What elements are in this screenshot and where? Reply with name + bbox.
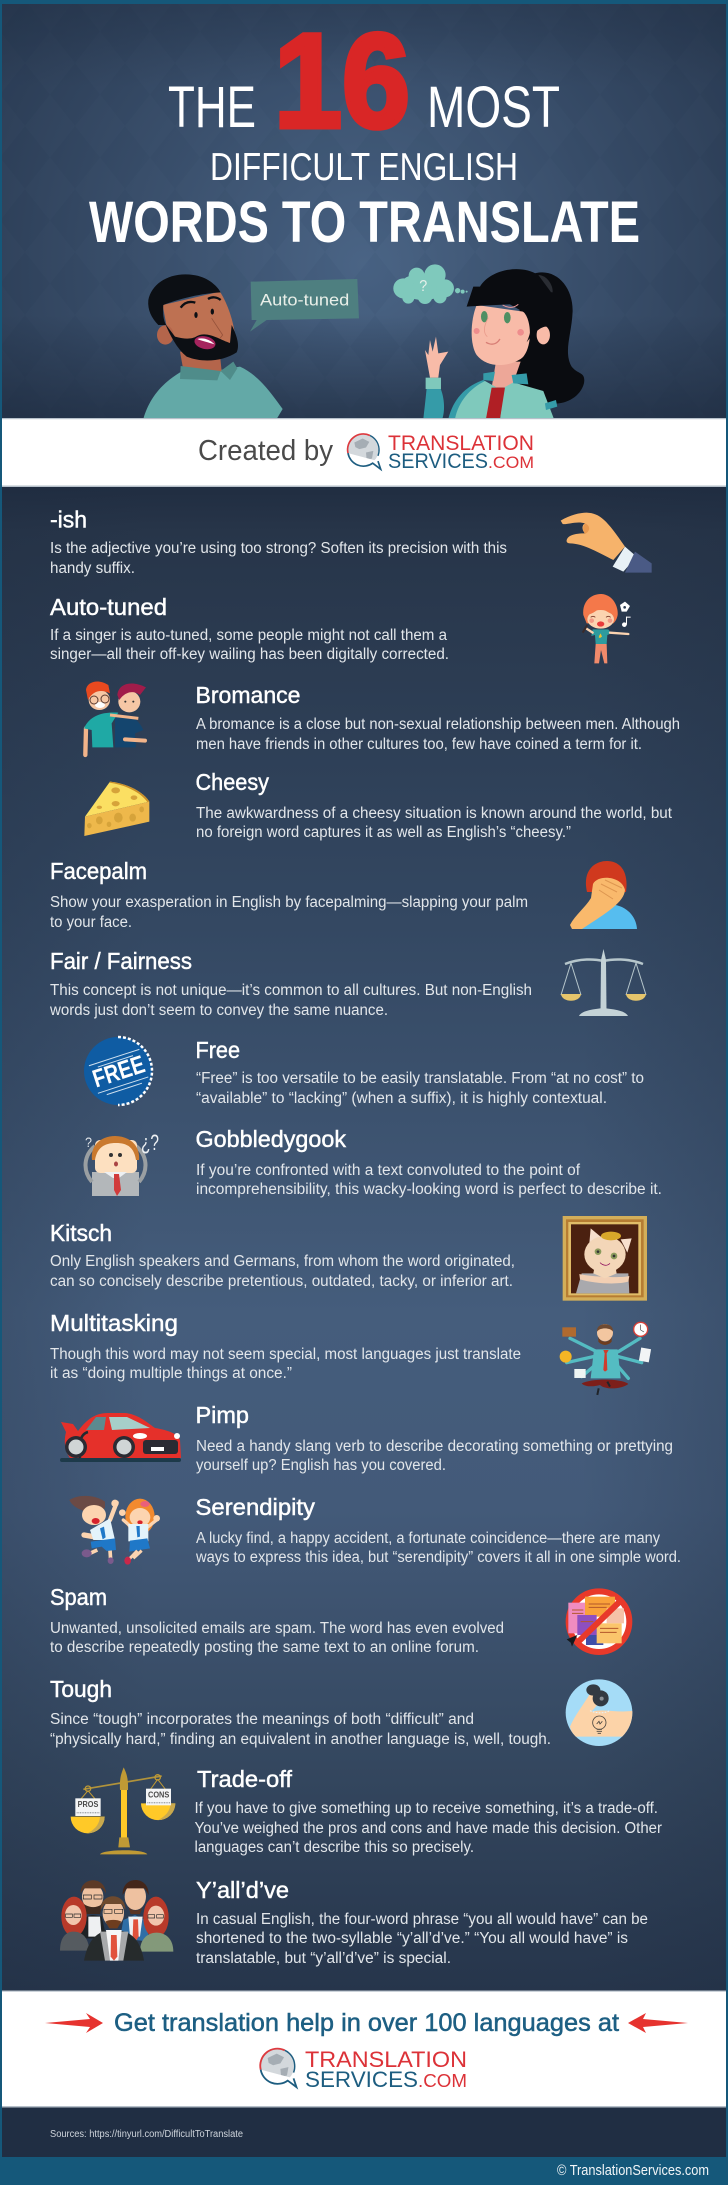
icon: pros and cons scale: PROS <box>78 1800 99 1809</box>
description: Trade-off: If you have to give something up to receive something, it’s a trade-off. <box>194 1800 658 1817</box>
entry: Serendipity <box>195 1494 681 1566</box>
arrow: right <box>628 2013 688 2033</box>
icon: confused man <box>85 1130 159 1196</box>
description: Tough <box>50 1711 551 1748</box>
icon: no spam sign <box>567 1591 629 1652</box>
entry: Y'all'd've: Y’all’d’ve <box>196 1877 289 1903</box>
entry: Cheesy <box>196 769 673 841</box>
description: Serendipity: ways to express this idea, but “serendipity” covers it all in one simple word. <box>195 1549 681 1566</box>
entry: Trade-off <box>194 1766 662 1856</box>
copyright bar <box>0 2157 728 2185</box>
description: Pimp <box>196 1438 673 1474</box>
description: Cheesy: The awkwardness of a cheesy situation is known around the world, but <box>196 805 673 822</box>
entry: Serendipity: Serendipity <box>196 1494 316 1520</box>
icon: confused man: ¿? <box>141 1130 159 1155</box>
description: Trade-off <box>194 1800 662 1856</box>
description: Tough: “physically hard,” finding an equivalent in another language is, well, tough. <box>50 1731 551 1748</box>
thought bubble: ? <box>419 278 427 295</box>
description: Trade-off: languages can’t describe this so precisely. <box>194 1839 474 1856</box>
icon: group of people <box>60 1880 173 1961</box>
description: Kitsch: Only English speakers and Germans, from whom the word originated, <box>50 1253 515 1270</box>
entry: Fair / Fairness: Fair / Fairness <box>50 948 192 974</box>
description: Free: “Free” is too versatile to be easily translatable. From “at no cost” to <box>196 1070 644 1087</box>
icon: jumping children <box>69 1496 160 1565</box>
entry: Pimp <box>196 1402 673 1474</box>
illustration: woman listening <box>423 269 584 419</box>
description: Serendipity: A lucky find, a happy accident, a fortunate coincidence—there are many <box>196 1530 660 1547</box>
icon: free badge <box>84 1037 152 1105</box>
description: -ish: handy suffix. <box>50 560 135 577</box>
description: Pimp: Need a handy slang verb to describe decorating something or prettying <box>196 1438 673 1455</box>
description: Facepalm: to your face. <box>50 914 132 931</box>
entry: Spam <box>50 1584 504 1656</box>
description: Auto-tuned <box>50 627 449 663</box>
description: Fair / Fairness <box>49 982 532 1019</box>
entry: Gobbledygook <box>196 1126 662 1198</box>
icon: framed cat portrait <box>563 1216 647 1301</box>
icon: red sports car <box>60 1413 181 1462</box>
panel: sources footer <box>2 2108 726 2157</box>
logo: Translation Services <box>260 2047 467 2092</box>
description: Free <box>196 1070 644 1107</box>
description: Fair / Fairness: This concept is not unique—it’s common to all cultures. But non-English <box>50 982 532 999</box>
panel: created by strip <box>2 418 726 487</box>
entry: Bromance <box>196 682 680 753</box>
description: Y'all'd've: translatable, but “y’all’d’ve” is special. <box>196 1950 451 1967</box>
title <box>89 7 640 255</box>
description: Bromance: A bromance is a close but non-sexual relationship between men. Although <box>196 716 680 733</box>
entry: Facepalm: Facepalm <box>50 858 147 884</box>
description: Auto-tuned: singer—all their off-key wailing has been digitally corrected. <box>50 646 449 663</box>
entry: Cheesy: Cheesy <box>196 769 269 795</box>
speech bubble: Auto-tuned: Auto-tuned <box>260 291 349 310</box>
icon: flexed arm with dumbbell <box>566 1679 633 1746</box>
description: Facepalm: Show your exasperation in English by facepalming—slapping your palm <box>50 894 528 911</box>
entry: Multitasking: Multitasking <box>50 1310 178 1336</box>
title: MOST <box>427 75 560 140</box>
icon: confused man: ? <box>85 1134 92 1150</box>
icon: free badge: FREE <box>89 1050 148 1093</box>
description: Pimp: yourself up? English has you covered. <box>196 1457 446 1474</box>
entry: Multitasking <box>50 1310 521 1382</box>
icon: multitasking man <box>560 1322 651 1395</box>
panel: header <box>2 4 726 419</box>
description: Gobbledygook: incomprehensibility, this wacky-looking word is perfect to describe it. <box>196 1181 662 1198</box>
description: Cheesy: no foreign word captures it as well as English’s “cheesy.” <box>196 824 571 841</box>
description: Gobbledygook: If you’re confronted with a text convoluted to the point of <box>196 1162 581 1179</box>
icon: two friends <box>84 681 146 755</box>
description: Kitsch: can so concisely describe pretentious, outdated, tacky, or inferior art. <box>50 1273 513 1290</box>
entry: Trade-off: Trade-off <box>197 1766 293 1792</box>
description: Fair / Fairness: words just don’t seem to convey the same nuance. <box>49 1002 388 1019</box>
entry: Spam: Spam <box>50 1584 107 1610</box>
icon: balance scales <box>561 949 646 1016</box>
title: THE <box>168 75 256 140</box>
entry: Gobbledygook: Gobbledygook <box>196 1126 346 1152</box>
entry: Facepalm <box>50 858 528 931</box>
entry: Auto-tuned <box>50 594 449 663</box>
call to action text: Get translation help in over 100 languages at <box>114 2009 619 2037</box>
entry: Free <box>196 1037 644 1107</box>
description: Spam: Unwanted, unsolicited emails are spam. The word has even evolved <box>50 1620 504 1637</box>
title: DIFFICULT ENGLISH <box>210 146 518 189</box>
description: -ish: Is the adjective you’re using too strong? Soften its precision with this <box>50 540 507 557</box>
title: 16 <box>274 7 410 156</box>
arrow: left <box>45 2013 103 2033</box>
icon: wedge of cheese <box>84 782 149 836</box>
entry: Kitsch: Kitsch <box>50 1220 112 1246</box>
description: Free: “available” to “lacking” (when a suffix), it is highly contextual. <box>196 1090 607 1107</box>
thought bubble <box>393 264 468 304</box>
logo: Translation Services: .COM <box>418 2071 467 2091</box>
entry: Tough: Tough <box>50 1676 112 1702</box>
description: Auto-tuned: If a singer is auto-tuned, some people might not call them a <box>50 627 447 644</box>
description: Multitasking: Though this word may not seem special, most languages just translate <box>50 1346 521 1363</box>
description: Cheesy <box>196 805 673 841</box>
description: Y'all'd've: shortened to the two-syllable “y’all’d’ve.” “You all would have” is <box>196 1930 628 1947</box>
description: Serendipity <box>195 1530 681 1566</box>
icon: facepalm <box>570 861 637 929</box>
entry: Free: Free <box>196 1037 240 1063</box>
description: Multitasking <box>50 1346 521 1382</box>
entry: Bromance: Bromance <box>196 682 300 708</box>
description: Y'all'd've <box>196 1911 648 1967</box>
description: Bromance: men have friends in other cultures too, few have coined a term for it. <box>196 736 642 753</box>
logo: Translation Services <box>348 432 534 473</box>
logo: Translation Services: TRANSLATION <box>305 2047 467 2072</box>
entry: Kitsch <box>50 1220 515 1290</box>
icon: pros and cons scale: CONS <box>148 1790 170 1799</box>
entry: -ish <box>50 506 507 577</box>
created by label: Created by <box>198 435 333 467</box>
entry: Fair / Fairness <box>49 948 532 1019</box>
icon: singing girl <box>583 594 631 663</box>
icon: pinching hand <box>561 513 652 573</box>
description: Spam: to describe repeatedly posting the same text to an online forum. <box>50 1639 479 1656</box>
panel: call to action <box>2 1990 726 2108</box>
description: Bromance <box>196 716 680 753</box>
logo: Translation Services: TRANSLATION <box>388 432 534 455</box>
entry: Tough <box>50 1676 551 1748</box>
icon: pros and cons scale <box>71 1767 175 1854</box>
entry: Auto-tuned: Auto-tuned <box>50 594 167 620</box>
logo: Translation Services: .COM <box>488 453 534 472</box>
description: -ish <box>50 540 507 577</box>
description: Kitsch <box>50 1253 515 1290</box>
description: Trade-off: You’ve weighed the pros and cons and have made this decision. Other <box>194 1820 662 1837</box>
description: Y'all'd've: In casual English, the four-word phrase “you all would have” can be <box>196 1911 648 1928</box>
logo: Translation Services: SERVICES <box>388 450 488 473</box>
description: Facepalm <box>50 894 528 931</box>
illustration: man speaking <box>143 274 283 419</box>
description: Spam <box>50 1620 504 1656</box>
speech bubble: Auto-tuned <box>250 279 359 332</box>
description: Multitasking: it as “doing multiple things at once.” <box>50 1365 292 1382</box>
description: Gobbledygook <box>196 1162 662 1198</box>
sources: Sources: https://tinyurl.com/DifficultToTranslate <box>50 2129 243 2140</box>
entry: -ish: -ish <box>50 506 87 532</box>
entry: Pimp: Pimp <box>196 1402 249 1428</box>
panel: word list <box>2 487 726 1991</box>
entry: Y'all'd've <box>196 1877 648 1967</box>
description: Tough: Since “tough” incorporates the meanings of both “difficult” and <box>50 1711 474 1728</box>
logo: Translation Services: SERVICES <box>305 2067 418 2092</box>
